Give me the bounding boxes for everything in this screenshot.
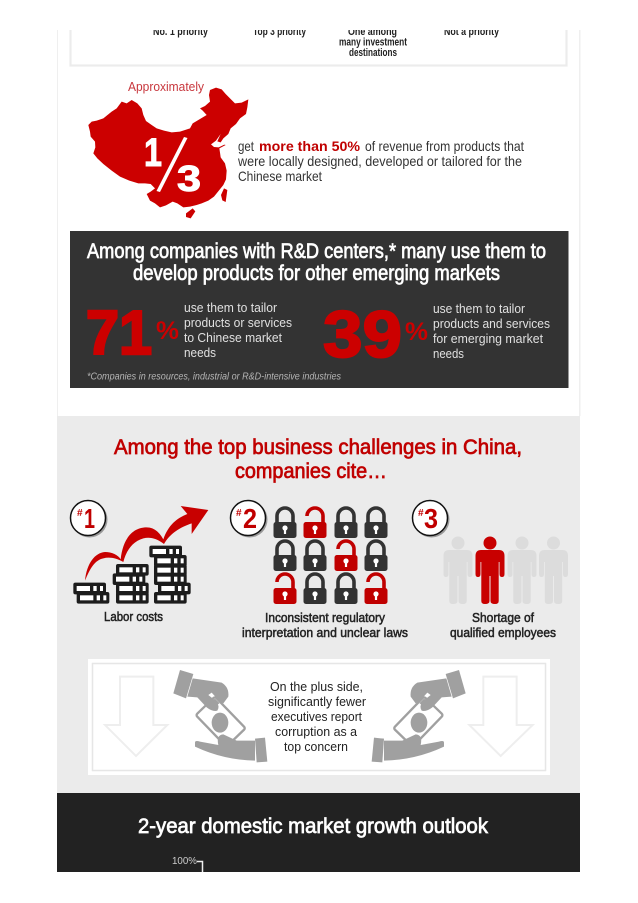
text: corruption statement: [268, 679, 367, 754]
text: 39 percent description: [433, 301, 550, 361]
stat: 39 percent: %: [405, 318, 428, 346]
label: Approximately: Approximately: [128, 79, 204, 94]
text: revenue statement: more than 50%: [259, 138, 361, 154]
badge: number 1: #: [77, 508, 83, 519]
text: 39 percent description: products and services: [433, 316, 550, 331]
badge: number 1: 1: [84, 503, 95, 534]
label: inconsistent regulatory interpretation: [242, 610, 408, 640]
text: revenue statement: were locally designed, developed or tailored for the: [237, 153, 522, 169]
stat: 39 percent: [323, 297, 428, 371]
text: 71 percent description: use them to tailor: [184, 300, 278, 315]
chart axis: 100 percent: [172, 856, 202, 872]
label: inconsistent regulatory interpretation: interpretation and unclear laws: [242, 625, 408, 640]
heading: business challenges: [114, 436, 522, 483]
icon: left hands exchanging money: [173, 670, 267, 762]
text: 71 percent description: to Chinese market: [184, 330, 282, 345]
heading: R&D centers: develop products for other emerging markets: [133, 262, 500, 285]
text: revenue statement: get: [238, 138, 254, 154]
icon: grid of padlocks: [274, 508, 388, 604]
heading: business challenges: companies cite…: [235, 460, 387, 483]
label: shortage of qualified employees: [450, 610, 556, 640]
legend label: No. 1 priority: No. 1 priority: [153, 26, 209, 38]
legend label: one among many investment destinations: many investment: [339, 36, 407, 48]
text: 71 percent description: needs: [184, 345, 216, 360]
text: revenue statement: [237, 138, 524, 184]
badge: number 2: 2: [243, 503, 257, 534]
text: corruption statement: On the plus side,: [270, 679, 363, 694]
footnote: *Companies in resources, industrial or R&D-intensive industries: [87, 372, 341, 382]
label: shortage of qualified employees: qualified employees: [450, 625, 556, 640]
fraction one third: 3: [177, 158, 201, 199]
map of China with one third: [88, 88, 248, 218]
text: 71 percent description: [184, 300, 292, 360]
legend label: one among many investment destinations: One among: [348, 26, 397, 38]
heading: growth outlook: 2-year domestic market growth outlook: [138, 815, 488, 838]
fraction one third: [144, 131, 201, 199]
badge: number 3: 3: [424, 503, 438, 534]
legend label: Not a priority: Not a priority: [444, 26, 500, 38]
panel: investment priority legend (cropped): [70, 10, 566, 66]
icon: right down arrow: [469, 677, 533, 756]
badge: number 3: [412, 500, 450, 538]
text: revenue statement: Chinese market: [238, 168, 322, 184]
badge: number 1: [70, 500, 108, 538]
heading: business challenges: Among the top business challenges in China,: [114, 436, 522, 459]
text: corruption statement: top concern: [284, 739, 348, 754]
icon: coin stacks with rising arrow: [73, 506, 208, 604]
heading: R&D centers: Among companies with R&D centers,* many use them to: [87, 240, 546, 263]
badge: number 2: #: [236, 508, 242, 519]
panel: business challenges: [57, 416, 580, 793]
label: inconsistent regulatory interpretation: Inconsistent regulatory: [265, 610, 385, 625]
fraction one third: 1: [144, 131, 162, 175]
stat: 39 percent: 39: [323, 297, 402, 371]
chart axis: 100 percent: 100%: [172, 856, 197, 867]
label: labor costs: Labor costs: [104, 609, 163, 624]
callout: corruption: [88, 659, 550, 775]
icon: right hands exchanging money: [372, 670, 466, 762]
icon: left down arrow: [105, 677, 167, 756]
badge: number 2: [230, 500, 268, 538]
text: 39 percent description: needs: [433, 346, 464, 361]
stat: 71 percent: 71: [86, 299, 152, 368]
badge: number 3: #: [418, 508, 424, 519]
legend label: Top 3 priority: Top 3 priority: [253, 26, 307, 38]
text: 39 percent description: use them to tailor: [433, 301, 526, 316]
legend label: one among many investment destinations: destinations: [349, 47, 397, 59]
icon: four people, one highlighted: [444, 536, 568, 604]
text: 39 percent description: for emerging market: [433, 331, 543, 346]
label: shortage of qualified employees: Shortage of: [472, 610, 534, 625]
text: 71 percent description: products or services: [184, 315, 292, 330]
text: corruption statement: significantly fewer: [268, 694, 367, 709]
panel: R&D centers: [70, 231, 568, 388]
panel: market growth outlook: [57, 793, 580, 872]
text: corruption statement: executives report: [271, 709, 362, 724]
stat: 71 percent: %: [156, 317, 179, 345]
heading: R&D centers: [87, 240, 546, 285]
legend label: one among many investment destinations: [339, 26, 407, 59]
text: corruption statement: corruption as a: [275, 724, 358, 739]
text: revenue statement: of revenue from products that: [365, 138, 524, 154]
